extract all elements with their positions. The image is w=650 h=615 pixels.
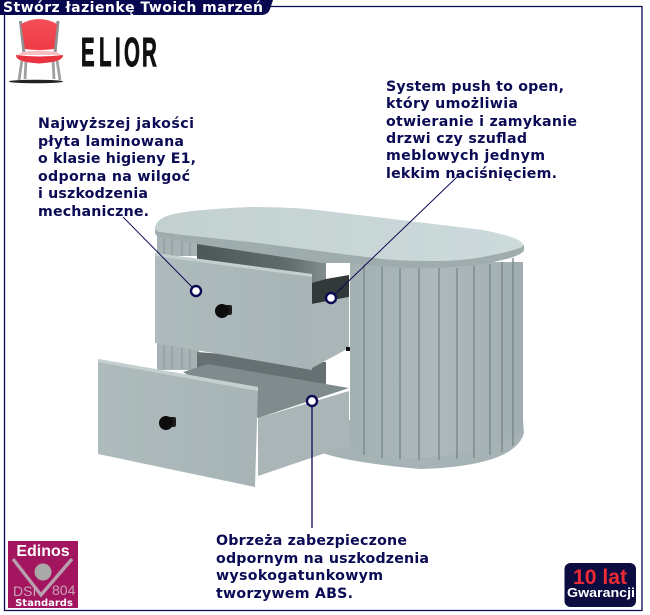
callout: board quality: o klasie higieny E1, — [38, 151, 196, 167]
furniture: oval cabinet with drawers — [98, 207, 524, 487]
cabinet left fluted section — [157, 234, 199, 370]
icon: lower drawer knob — [159, 416, 176, 430]
callout: push to open: otwieranie i zamykanie — [386, 114, 577, 130]
callout: board quality: mechaniczne. — [38, 204, 149, 220]
callout: push to open — [326, 79, 577, 303]
cabinet top surface — [155, 207, 524, 268]
badge: Edinos standards: DSI — [13, 583, 36, 599]
callout: ABS edges: Obrzeża zabezpieczone — [216, 533, 407, 549]
callout: board quality: odporna na wilgoć — [38, 169, 190, 185]
callout: board quality: płyta laminowana — [38, 134, 184, 150]
cabinet inner shadow back — [197, 243, 326, 384]
callout: push to open: drzwi czy szuflad — [386, 131, 527, 147]
badge: Edinos standards: 804 — [52, 582, 76, 598]
badge: 10 year warranty — [564, 563, 636, 607]
callout: push to open: meblowych jednym — [386, 148, 545, 164]
callout: push to open: który umożliwia — [386, 96, 518, 112]
icon: red chair — [9, 19, 63, 83]
callout: ABS edges — [216, 396, 429, 602]
badge: Edinos standards: Standards — [15, 598, 73, 609]
callout: ABS edges: wysokogatunkowym — [216, 568, 383, 584]
badge: 10 year warranty: 10 lat — [573, 566, 627, 589]
icon: upper drawer knob — [215, 304, 232, 318]
callout: ABS edges: tworzywem ABS. — [216, 586, 353, 602]
title banner: Stwórz łazienkę Twoich marzeń — [3, 0, 263, 16]
brand name: ELIOR — [81, 29, 157, 75]
callout: board quality: Najwyższej jakości — [38, 116, 194, 132]
badge: Edinos standards — [8, 541, 78, 609]
callout: board quality: i uszkodzenia — [38, 186, 148, 202]
badge: Edinos standards: Edinos — [16, 543, 70, 560]
callout: board quality — [38, 116, 201, 296]
callout: ABS edges: odpornym na uszkodzenia — [216, 551, 429, 567]
callout: push to open: System push to open, — [386, 79, 564, 95]
lower drawer — [98, 359, 349, 487]
cylindrical cabinet body — [320, 258, 524, 469]
badge: 10 year warranty: Gwarancji — [567, 585, 635, 600]
callout: push to open: lekkim naciśnięciem. — [386, 166, 557, 182]
upper drawer — [155, 253, 350, 370]
